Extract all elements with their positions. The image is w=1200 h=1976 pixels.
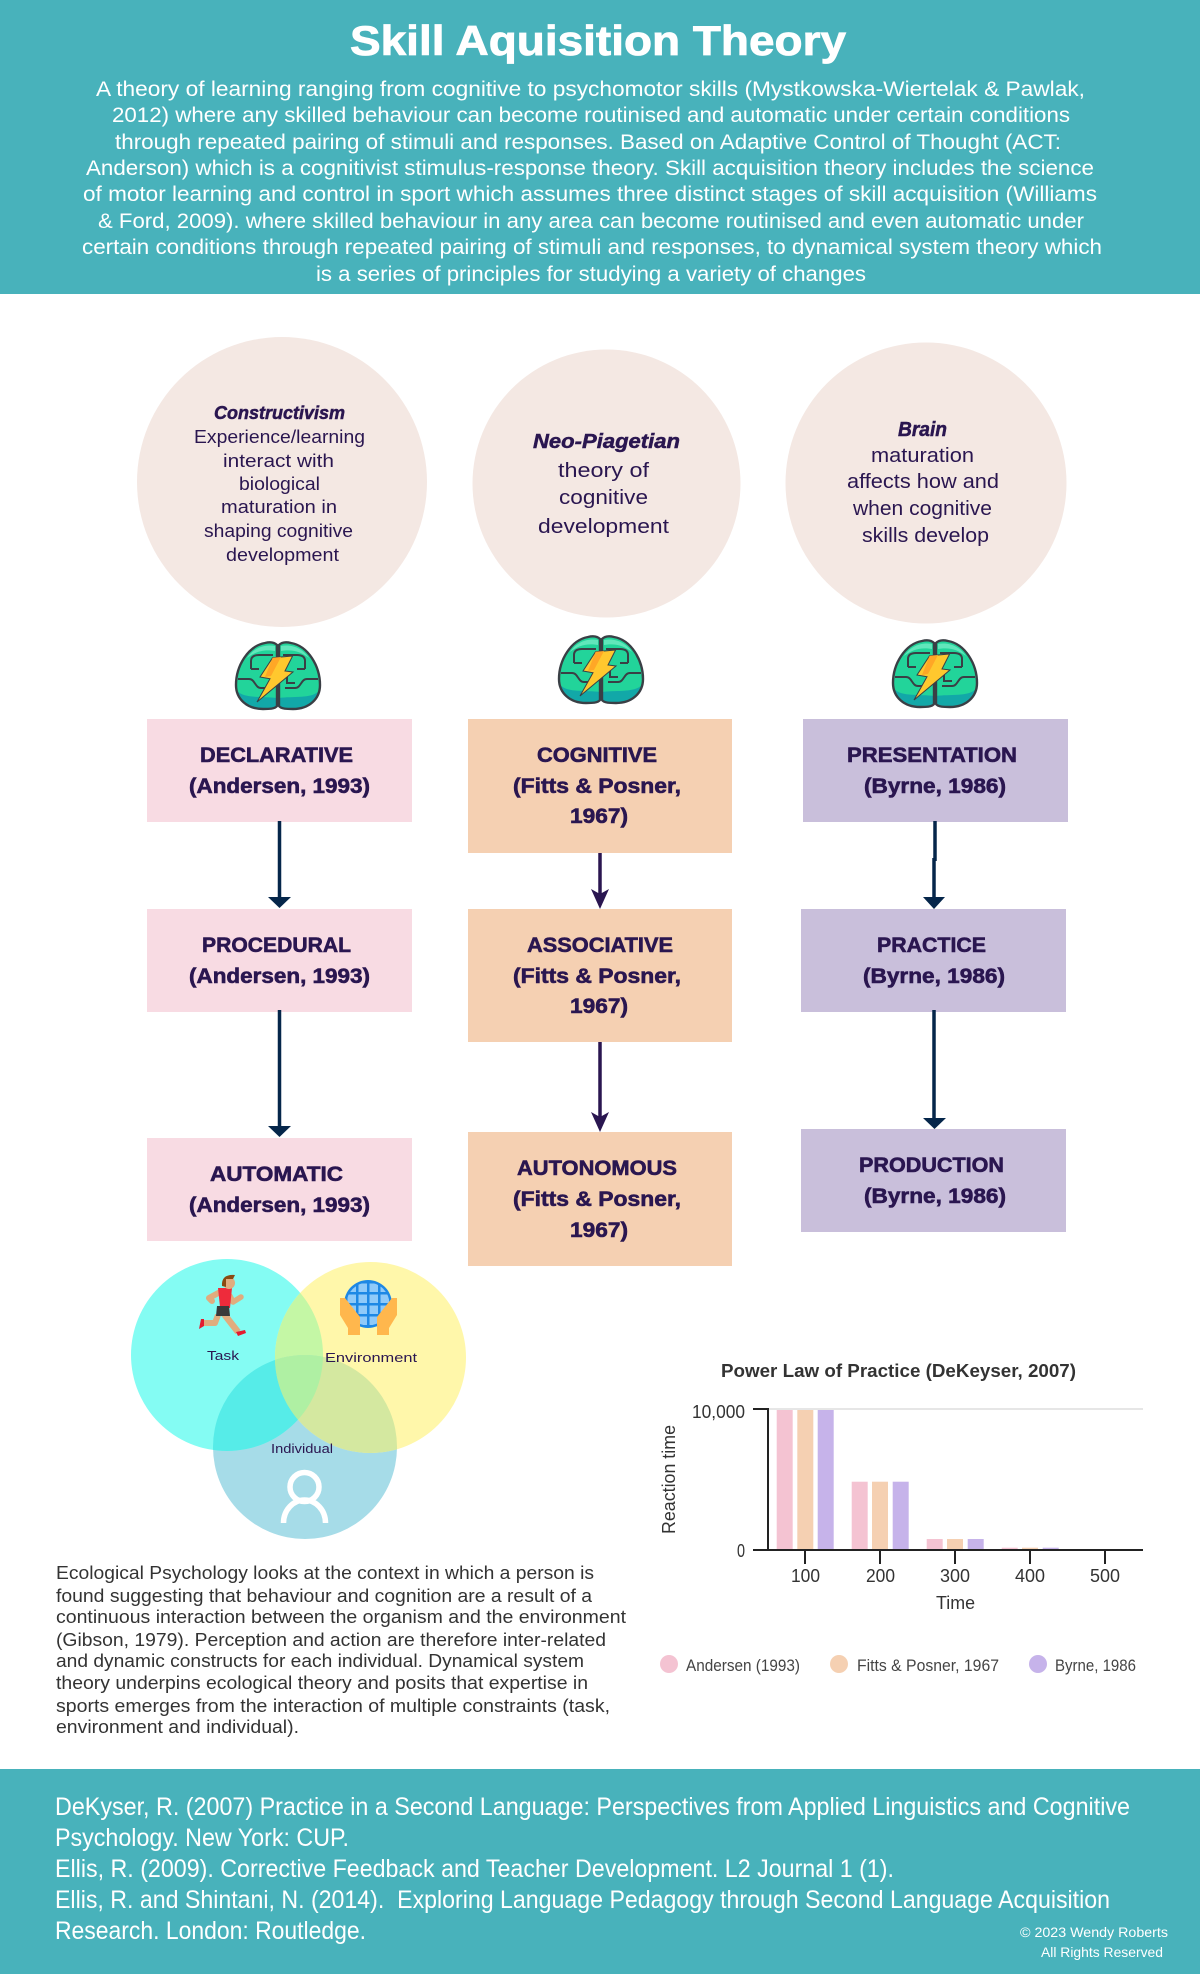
text block: ecological psychology — [56, 1563, 626, 1737]
copyright — [1020, 1924, 1168, 1960]
axis labels: 200 — [866, 1566, 895, 1586]
bars: Andersen — [777, 1410, 1018, 1550]
box: Presentation — [803, 719, 1068, 822]
arrow: cognitive to associative — [591, 853, 609, 909]
box: Production — [801, 1129, 1066, 1232]
axis labels: 10,000 — [692, 1402, 745, 1422]
references text — [55, 1793, 1130, 1945]
text block: ecological psychology: continuous interaction between the organism and the environment — [56, 1607, 626, 1627]
box: Cognitive: COGNITIVE — [537, 744, 657, 767]
box: Cognitive: (Fitts & Posner, — [513, 775, 681, 798]
circle: Neo-Piagetian: Neo-Piagetian — [533, 431, 680, 453]
circle: Constructivism: interact with — [223, 451, 334, 471]
icon: brain with lightning, column 2 — [559, 636, 643, 703]
arrow: presentation to practice — [923, 821, 945, 909]
intro text block — [82, 78, 1102, 286]
label: Environment: Environment — [325, 1350, 417, 1365]
icon: brain with lightning, column 1 — [236, 642, 320, 709]
arrow: associative to autonomous — [591, 1042, 609, 1132]
box: Autonomous — [468, 1132, 732, 1266]
legend — [660, 1655, 1136, 1675]
bar chart: power law of practice — [659, 1361, 1143, 1675]
box: Automatic — [147, 1138, 412, 1241]
axis labels: 0 — [737, 1541, 745, 1561]
axes — [753, 1409, 1143, 1564]
circle: Constructivism: Experience/learning — [194, 427, 365, 447]
box: Associative: (Fitts & Posner, — [513, 965, 681, 988]
box: Production: PRODUCTION — [859, 1154, 1004, 1177]
box: Autonomous: AUTONOMOUS — [517, 1157, 677, 1180]
box: Practice: PRACTICE — [877, 934, 986, 957]
circle: Brain: maturation — [871, 445, 974, 467]
circle: Brain: affects how and — [847, 471, 999, 493]
venn diagram: task, environment, individual — [131, 1259, 466, 1539]
box: Procedural — [147, 909, 412, 1012]
label: Individual: Individual — [271, 1441, 333, 1456]
intro text block: A theory of learning ranging from cognitive to psychomotor skills (Mystkowska-Wiertelak & Pawlak, — [96, 78, 1085, 101]
circle: Brain: skills develop — [862, 525, 989, 547]
intro text block: certain conditions through repeated pairing of stimuli and responses, to dynamical system theory which — [82, 236, 1102, 259]
text block: ecological psychology: and dynamic constructs for each individual. Dynamical system — [56, 1651, 584, 1671]
circle: Constructivism: maturation in — [221, 497, 337, 517]
circle: Neo-Piagetian: development — [538, 516, 669, 538]
bars: Fitts and Posner — [797, 1410, 1038, 1550]
box: Cognitive — [468, 719, 732, 853]
circle: Neo-Piagetian — [472, 350, 740, 618]
intro text block: 2012) where any skilled behaviour can become routinised and automatic under certain conditions — [112, 104, 1070, 127]
box: Associative: ASSOCIATIVE — [527, 934, 673, 957]
box: Practice: (Byrne, 1986) — [863, 965, 1005, 988]
axis labels: 500 — [1090, 1566, 1120, 1586]
circle: Brain: Brain — [898, 419, 947, 441]
references text: Psychology. New York: CUP. — [55, 1824, 349, 1852]
label: Task: Task — [207, 1348, 240, 1363]
circle: Constructivism — [137, 337, 427, 627]
axis labels: 300 — [940, 1566, 970, 1586]
box: Autonomous: (Fitts & Posner, — [513, 1188, 681, 1211]
chart title: Power Law of Practice (DeKeyser, 2007) — [721, 1361, 1076, 1381]
copyright: © 2023 Wendy Roberts — [1020, 1924, 1168, 1940]
box: Procedural: (Andersen, 1993) — [189, 965, 370, 988]
icon: globe in hands — [340, 1280, 397, 1335]
copyright: All Rights Reserved — [1041, 1944, 1163, 1960]
text block: ecological psychology: Ecological Psychology looks at the context in which a person is — [56, 1563, 594, 1583]
box: Automatic: AUTOMATIC — [210, 1163, 343, 1186]
intro text block: of motor learning and control in sport which assumes three distinct stages of skill acquisition (Williams — [83, 183, 1097, 206]
circle: Neo-Piagetian: cognitive — [559, 487, 648, 509]
text block: ecological psychology: theory underpins ecological theory and posits that expertise in — [56, 1673, 588, 1693]
box: Associative: 1967) — [570, 995, 628, 1018]
box: Production: (Byrne, 1986) — [864, 1185, 1006, 1208]
title: Skill Aquisition Theory — [350, 17, 847, 64]
intro text block: through repeated pairing of stimuli and responses. Based on Adaptive Control of Thought (ACT: — [115, 131, 1061, 154]
icon: person — [284, 1472, 326, 1523]
box: Presentation: (Byrne, 1986) — [864, 775, 1006, 798]
box: Associative — [468, 909, 732, 1042]
arrow: declarative to procedural — [268, 821, 291, 908]
circle: Brain: when cognitive — [852, 498, 992, 520]
bars: Byrne — [818, 1410, 1059, 1550]
circle: Neo-Piagetian: theory of — [558, 460, 650, 482]
text block: ecological psychology: sports emerges from the interaction of multiple constraints (task, — [56, 1696, 610, 1716]
box: Procedural: PROCEDURAL — [202, 934, 351, 957]
icon: brain with lightning, column 3 — [893, 640, 977, 707]
legend: Andersen (1993) — [686, 1656, 800, 1675]
axis labels: 400 — [1015, 1566, 1045, 1586]
intro text block: Anderson) which is a cognitivist stimulus-response theory. Skill acquisition theory includes the science — [86, 157, 1094, 180]
intro text block: is a series of principles for studying a variety of changes — [316, 263, 866, 286]
arrow: practice to production — [923, 1010, 946, 1129]
axis labels: 100 — [791, 1566, 820, 1586]
panel: header — [0, 0, 1200, 294]
text block: ecological psychology: found suggesting that behaviour and cognition are a result of a — [56, 1586, 593, 1606]
box: Autonomous: 1967) — [570, 1219, 628, 1242]
box: Declarative — [147, 719, 412, 822]
arrow: procedural to automatic — [268, 1010, 291, 1137]
circle: Brain — [786, 342, 1066, 624]
circle: Constructivism: development — [226, 545, 339, 565]
box: Practice — [801, 909, 1066, 1012]
box: Cognitive: 1967) — [570, 805, 628, 828]
references text: DeKyser, R. (2007) Practice in a Second Language: Perspectives from Applied Linguistics and Cognitive — [55, 1793, 1130, 1821]
box: Declarative: (Andersen, 1993) — [189, 775, 370, 798]
legend: Fitts & Posner, 1967 — [857, 1656, 999, 1675]
references text: Ellis, R. and Shintani, N. (2014). Exploring Language Pedagogy through Second Language Acquisition — [55, 1886, 1110, 1914]
axis labels: Time — [936, 1593, 975, 1613]
axis labels: Reaction time — [659, 1425, 679, 1534]
references text: Research. London: Routledge. — [55, 1917, 366, 1945]
panel: footer references — [0, 1769, 1200, 1974]
box: Automatic: (Andersen, 1993) — [189, 1194, 370, 1217]
text block: ecological psychology: (Gibson, 1979). Perception and action are therefore inter-related — [56, 1630, 606, 1650]
intro text block: & Ford, 2009). where skilled behaviour in any area can become routinised and even automatic under — [98, 210, 1084, 233]
references text: Ellis, R. (2009). Corrective Feedback and Teacher Development. L2 Journal 1 (1). — [55, 1855, 894, 1883]
icon: runner — [199, 1275, 246, 1336]
circle: Constructivism: shaping cognitive — [204, 521, 353, 541]
circle: Constructivism: biological — [239, 474, 320, 494]
legend: Byrne, 1986 — [1055, 1656, 1136, 1675]
axis labels — [659, 1402, 1120, 1613]
box: Presentation: PRESENTATION — [847, 744, 1017, 767]
circle: Constructivism: Constructivism — [214, 403, 345, 423]
text block: ecological psychology: environment and individual). — [56, 1717, 299, 1737]
box: Declarative: DECLARATIVE — [200, 744, 353, 767]
